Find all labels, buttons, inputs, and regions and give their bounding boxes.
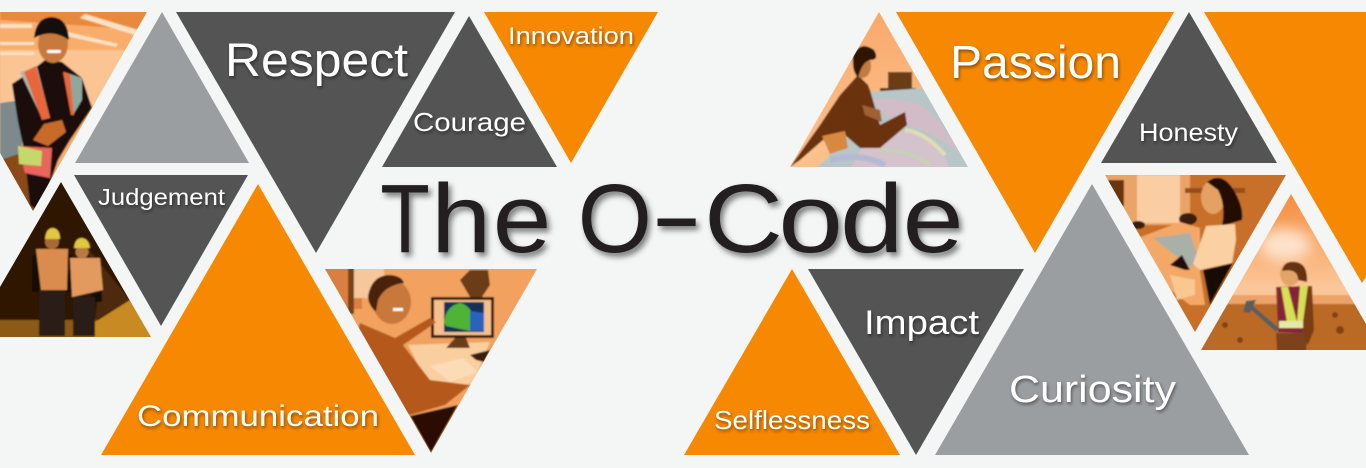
heading: selflessness: Selflessness (714, 405, 870, 435)
panel: communication (101, 184, 415, 455)
panel: respect (176, 12, 455, 253)
heading: impact: Impact (864, 304, 980, 342)
photo triangle: worker in warehouse (0, 12, 147, 211)
title: O (578, 164, 652, 273)
photo triangle: colleague at plotter (1105, 175, 1286, 332)
title: d (840, 164, 904, 273)
panel: courage (382, 16, 557, 167)
photo triangle: geologist at monitor (320, 264, 542, 459)
photo triangle: field geologist (1196, 190, 1366, 355)
heading: judgement: Judgement (98, 184, 226, 210)
photo triangle: two miners (0, 182, 151, 337)
heading: communication: Communication (137, 400, 379, 433)
title: h (431, 164, 491, 273)
title: o (778, 164, 843, 273)
panel: honesty (1101, 12, 1277, 163)
title: T (380, 164, 430, 273)
panel: orange corner triangle (1204, 12, 1366, 283)
title: e (903, 164, 964, 273)
photo triangle: geologist studying map (790, 12, 968, 167)
title: e (493, 164, 551, 273)
heading: innovation: Innovation (508, 23, 634, 50)
panel: passion (896, 12, 1174, 253)
heading: passion: Passion (950, 36, 1121, 88)
panel: judgement (74, 175, 248, 326)
title: C (704, 164, 783, 273)
title: - (651, 160, 703, 269)
panel: selflessness (684, 269, 900, 455)
panel: grey triangle (75, 12, 249, 163)
heading: curiosity: Curiosity (1009, 369, 1176, 411)
heading: honesty: Honesty (1139, 119, 1239, 147)
heading: respect: Respect (225, 33, 408, 86)
panel: innovation (484, 12, 658, 163)
panel: curiosity (935, 184, 1249, 455)
heading: courage: Courage (413, 107, 526, 137)
panel: impact (808, 269, 1024, 455)
